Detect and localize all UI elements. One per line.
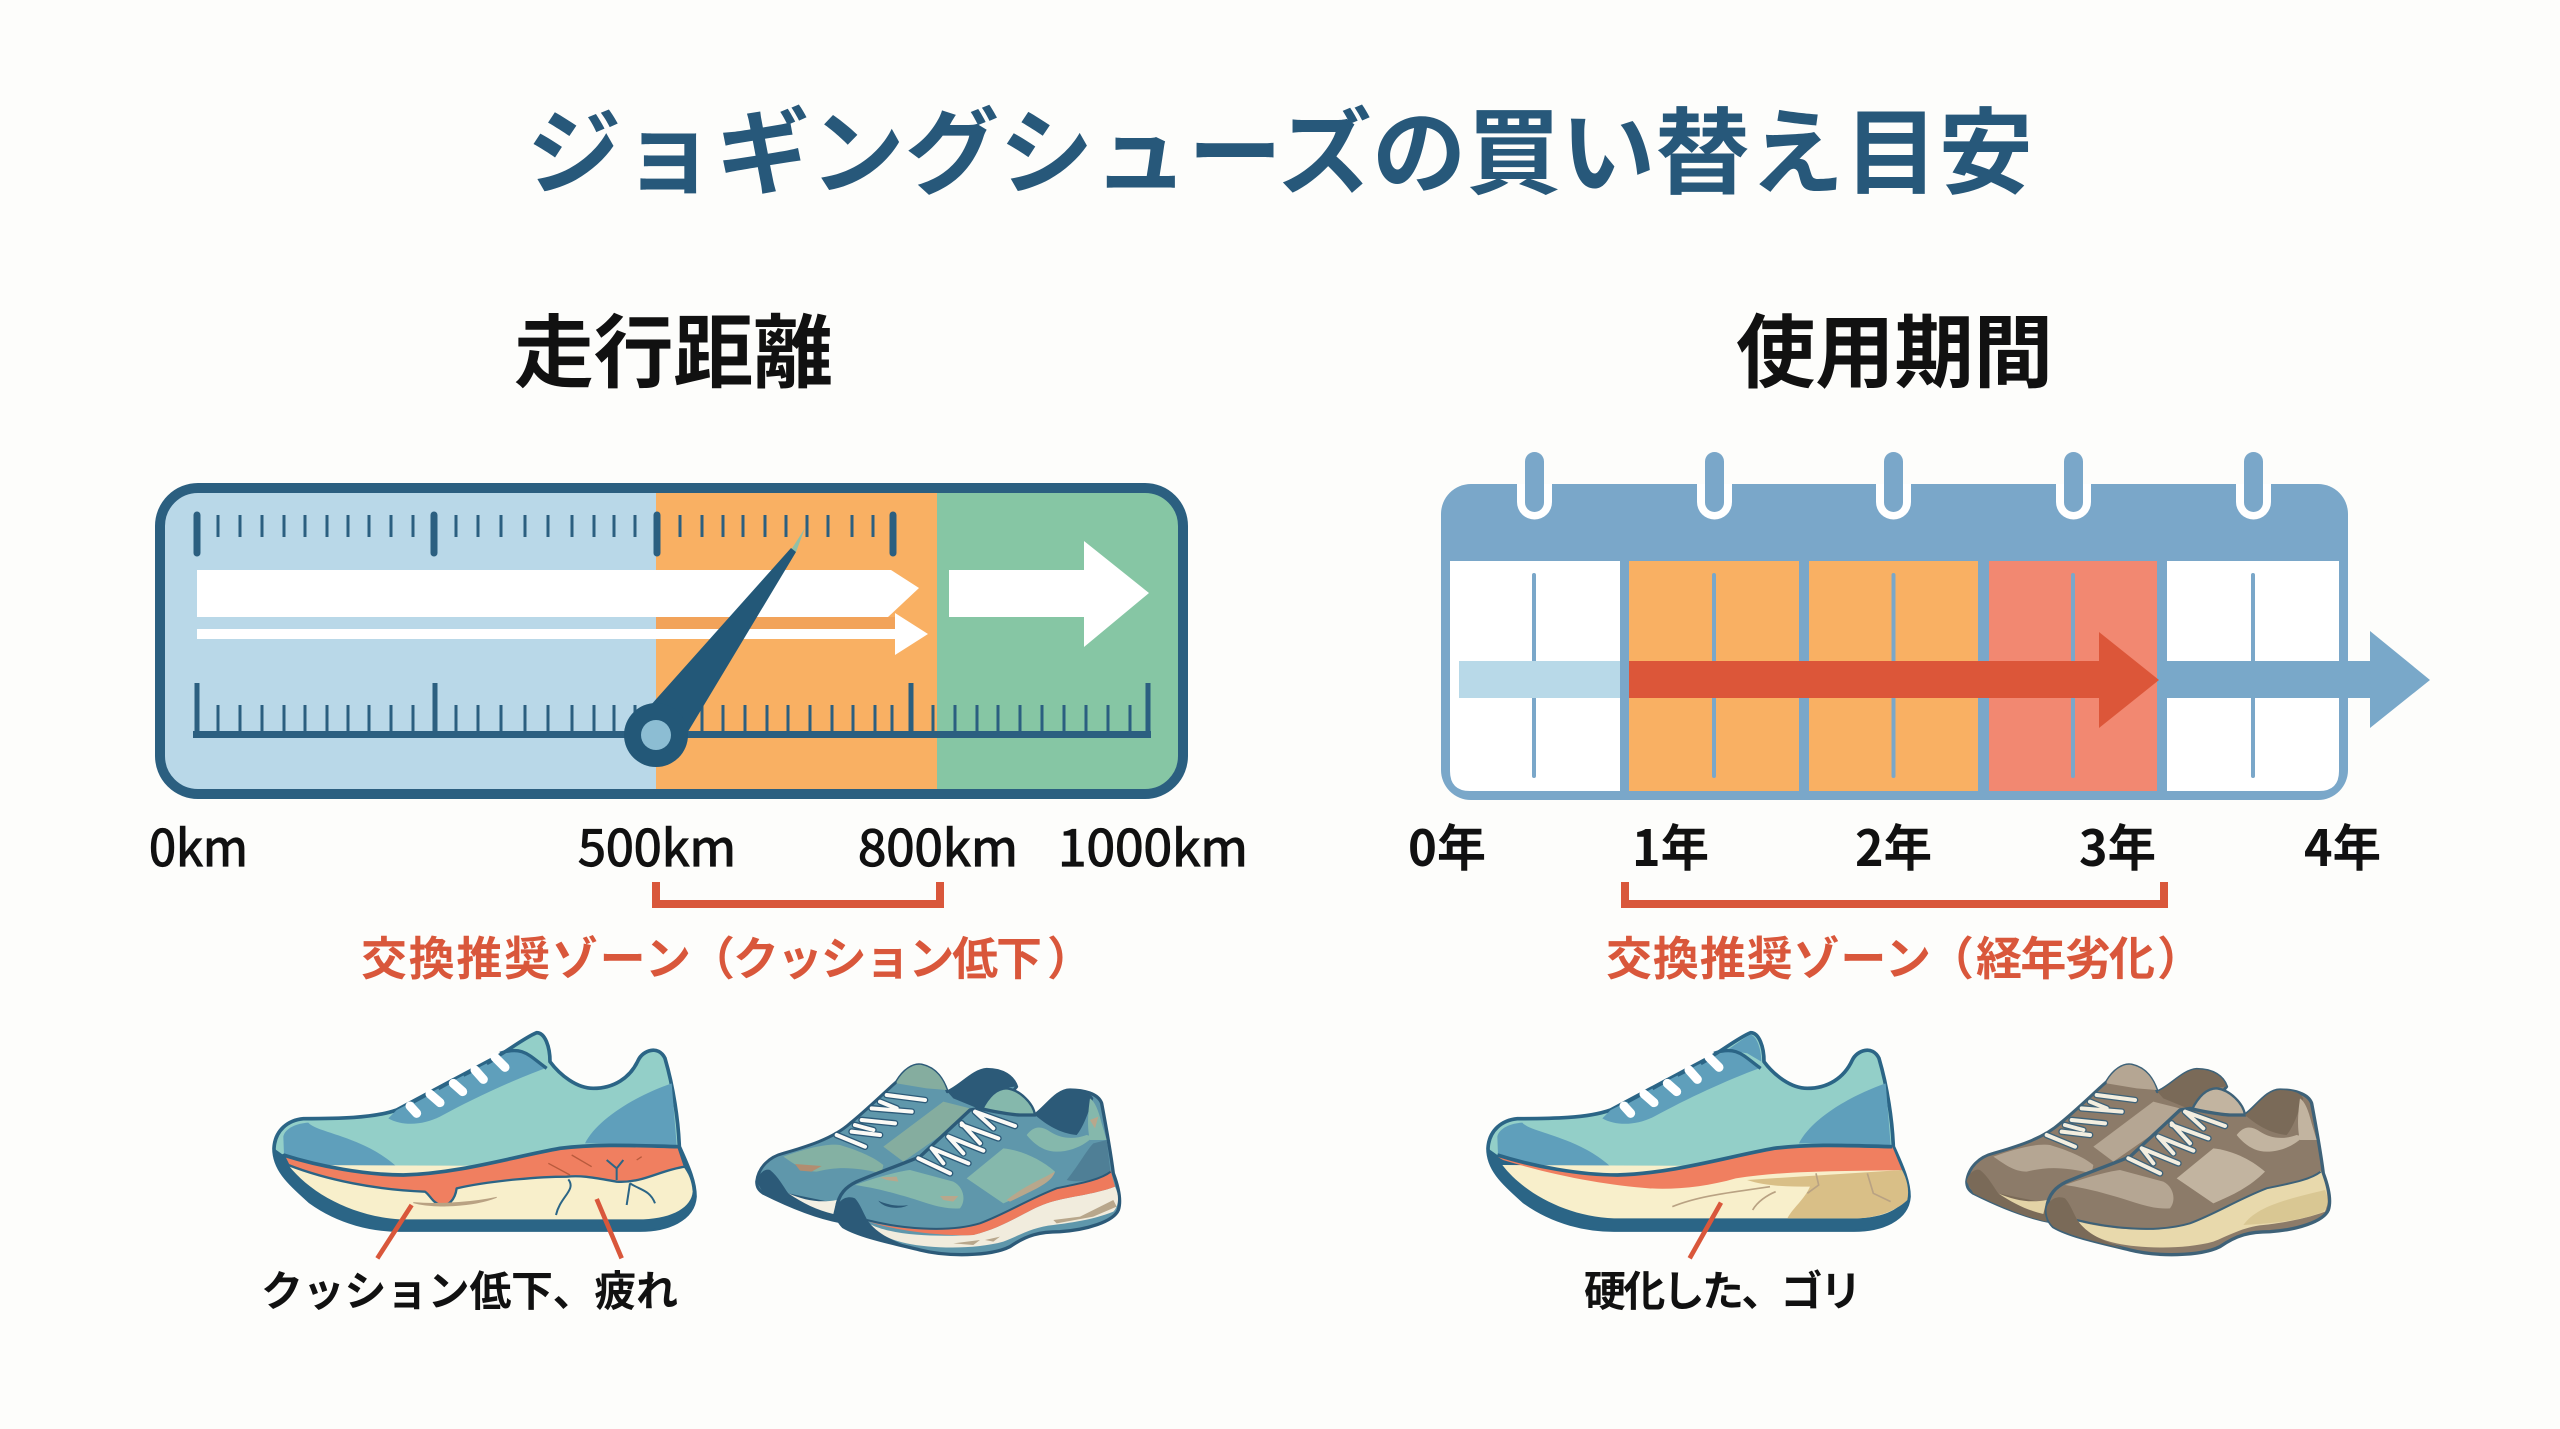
bottom ruler <box>193 683 1151 738</box>
white arrow: lower <box>197 613 928 655</box>
icon: hardened shoe <box>1488 1033 1909 1258</box>
icon: worn running shoes <box>757 1065 1120 1255</box>
label: 3年: 3年 <box>2079 809 2156 881</box>
callout: period replacement zone <box>1606 923 2203 989</box>
heading: usage period: 使用期間 <box>1736 289 2053 405</box>
label: 500km: 500km <box>578 809 736 881</box>
period axis labels <box>1408 809 2381 881</box>
panel: calendar <box>1441 452 2430 800</box>
callout: distance replacement zone: 交換推奨ゾーン <box>361 923 691 989</box>
label: 1000km: 1000km <box>1058 809 1248 881</box>
bracket: distance zone <box>656 882 940 904</box>
label: 0km: 0km <box>149 809 248 881</box>
panel: distance gauge <box>155 483 1188 799</box>
binder rings <box>1517 452 2271 520</box>
cell centre lines <box>1534 575 2253 776</box>
note: cushion decline: クッション低下、疲れ <box>261 1258 678 1319</box>
label: 2年: 2年 <box>1855 809 1932 881</box>
callout: period replacement zone: （ <box>1928 923 1974 989</box>
pointer lines <box>377 1199 622 1258</box>
calendar frame <box>1441 484 2348 800</box>
icon: aged tan shoes <box>1967 1065 2330 1255</box>
label: 800km: 800km <box>858 809 1018 881</box>
note: hardened: 硬化した、ゴリ <box>1584 1258 1862 1319</box>
white arrow: right zone <box>949 541 1149 647</box>
callout: distance replacement zone: （ <box>689 923 735 989</box>
arrow: red replacement span <box>1629 632 2159 728</box>
title: ジョギングシューズの買い替え目安 <box>527 78 2033 214</box>
arrow: light start segment <box>1459 661 1620 698</box>
callout: period replacement zone: 経年劣化 <box>1976 923 2155 989</box>
heading: running distance: 走行距離 <box>514 289 833 405</box>
bracket: period zone <box>1625 882 2164 904</box>
label: 4年: 4年 <box>2304 809 2381 881</box>
callout: period replacement zone: ） <box>2157 923 2203 989</box>
calendar cells <box>1450 561 2339 791</box>
callout: distance replacement zone <box>361 923 1093 989</box>
white arrow: upper <box>197 570 919 617</box>
gauge needle <box>624 528 805 767</box>
callout: distance replacement zone: クッション低下 <box>733 923 1042 989</box>
arrow: blue timeline <box>2157 631 2430 728</box>
top ruler ticks <box>197 515 893 553</box>
pointer line <box>1690 1203 1721 1258</box>
distance axis labels <box>149 809 1248 881</box>
label: 0年: 0年 <box>1408 809 1486 881</box>
icon: cushion shoe cracked <box>274 1033 695 1258</box>
callout: distance replacement zone: ） <box>1047 923 1093 989</box>
label: 1年: 1年 <box>1632 809 1709 881</box>
callout: period replacement zone: 交換推奨ゾーン <box>1606 923 1931 989</box>
